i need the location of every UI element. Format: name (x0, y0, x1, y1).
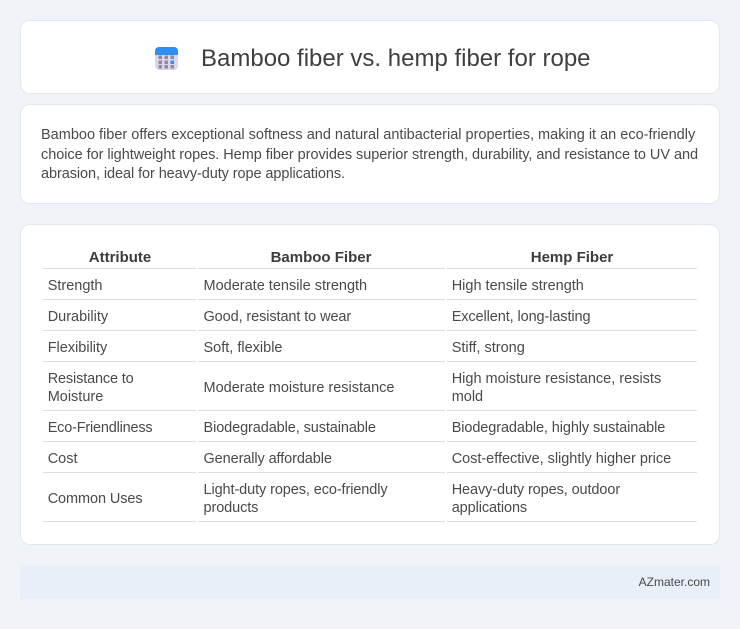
summary text: choice for lightweight ropes. Hemp fiber provides superior strength, durability, and resistance to UV and (41, 146, 698, 162)
table rows: Eco-Friendliness (48, 420, 152, 436)
table rows: Generally affordable (204, 451, 332, 467)
table rows: Resistance to (48, 371, 134, 387)
table rows: Heavy-duty ropes, outdoor (452, 482, 620, 498)
table rows: Common Uses (48, 491, 142, 507)
summary text: abrasion, ideal for heavy-duty rope applications. (41, 166, 345, 182)
table rows: Cost-effective, slightly higher price (452, 451, 671, 467)
title: Bamboo fiber vs. hemp fiber for rope (201, 45, 591, 72)
table rows: Moisture (48, 389, 103, 405)
table rows: Moderate tensile strength (204, 278, 367, 294)
table rows: applications (452, 500, 527, 516)
table rows: Moderate moisture resistance (204, 380, 394, 396)
table rows: Cost (48, 451, 78, 467)
icon: calendar (155, 47, 178, 70)
table rows: Flexibility (48, 340, 107, 356)
header card (20, 20, 720, 94)
table rows: Biodegradable, highly sustainable (452, 420, 665, 436)
table rows: mold (452, 389, 483, 405)
table rows: Durability (48, 309, 108, 325)
table rows (43, 268, 697, 522)
table rows: Excellent, long-lasting (452, 309, 590, 325)
table rows: products (204, 500, 258, 516)
comparison table card (20, 224, 720, 545)
summary card (20, 104, 720, 204)
table header: Bamboo Fiber (271, 249, 371, 266)
table rows: High moisture resistance, resists (452, 371, 661, 387)
summary text: Bamboo fiber offers exceptional softness and natural antibacterial properties, making it an eco-friendly (41, 127, 695, 143)
table rows: Strength (48, 278, 103, 294)
table rows: Light-duty ropes, eco-friendly (204, 482, 388, 498)
footer text: AZmater.com (639, 575, 710, 589)
footer bar (20, 565, 720, 599)
table header: Attribute (89, 249, 151, 266)
table rows: Biodegradable, sustainable (204, 420, 376, 436)
table rows: Stiff, strong (452, 340, 525, 356)
summary text (41, 127, 698, 182)
table header (89, 249, 613, 266)
table header: Hemp Fiber (531, 249, 613, 266)
table rows: High tensile strength (452, 278, 584, 294)
table rows: Good, resistant to wear (204, 309, 351, 325)
table rows: Soft, flexible (204, 340, 282, 356)
